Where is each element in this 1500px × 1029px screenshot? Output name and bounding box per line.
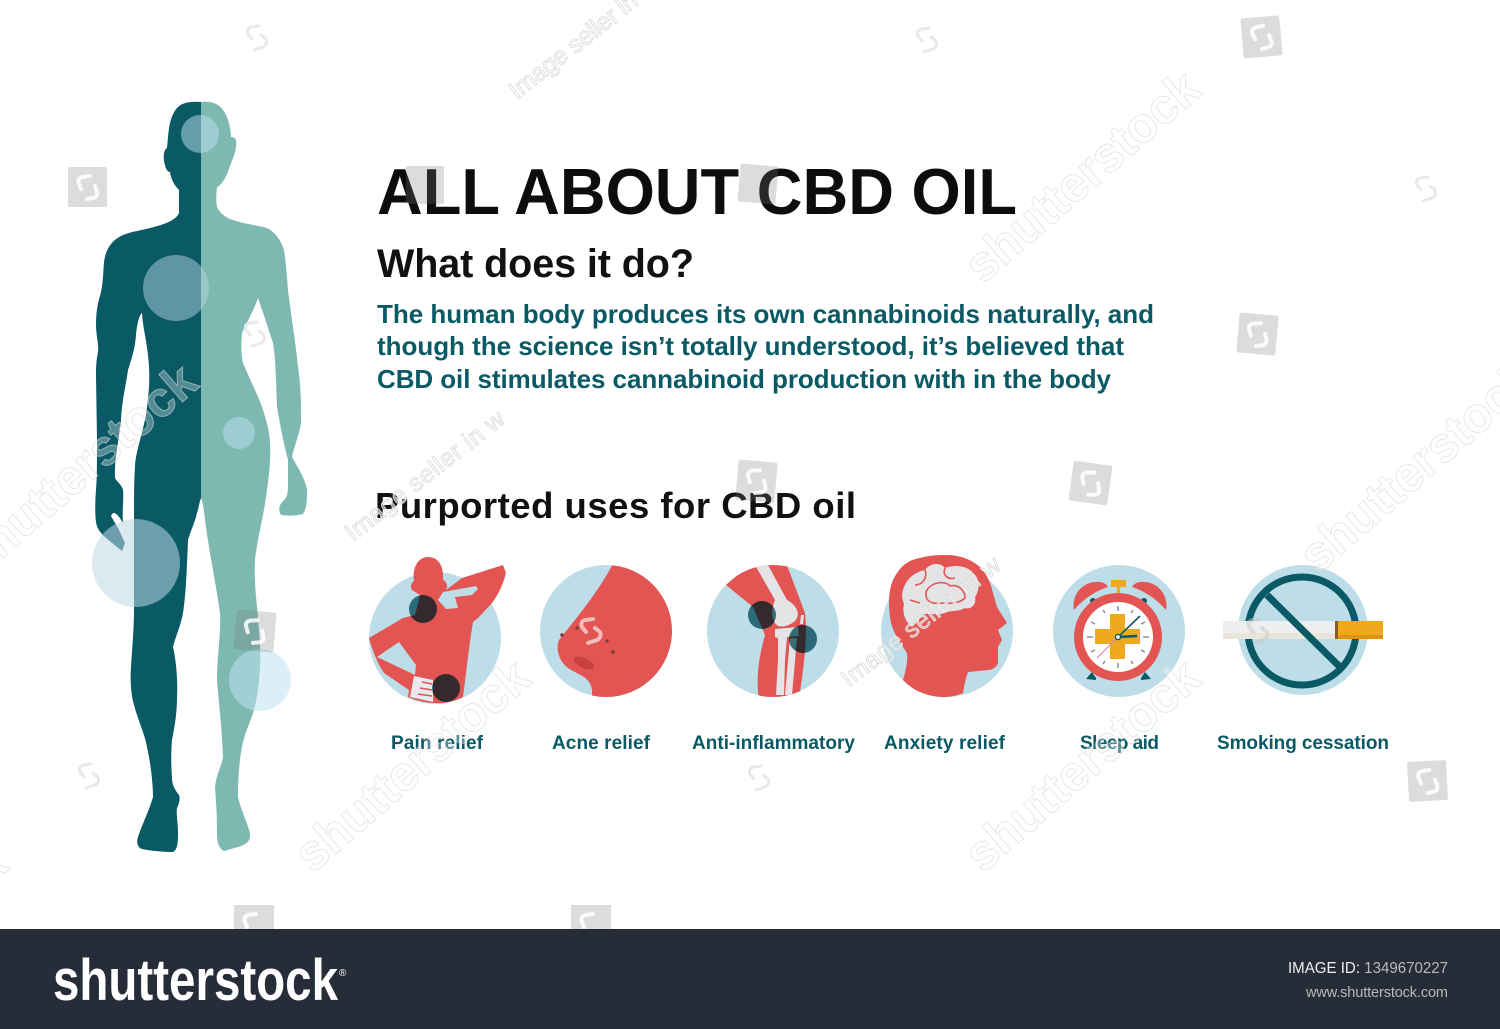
watermark layer: shutterstock <box>283 648 541 882</box>
subheading: purported uses: Purported uses for CBD oil <box>375 485 856 526</box>
watermark layer: shutterstock <box>953 648 1211 882</box>
label: acne relief: Acne relief <box>552 733 651 754</box>
watermark layer: Image seller in w <box>339 404 511 547</box>
highlight circle: hand <box>92 519 180 607</box>
body left half: dark teal <box>95 102 201 852</box>
body right half: light teal <box>201 102 307 851</box>
icon: acne relief <box>540 565 672 697</box>
website: www.shutterstock.com <box>1305 985 1448 1001</box>
highlight circle: head <box>181 115 219 153</box>
label: smoking cessation: Smoking cessation <box>1217 733 1389 754</box>
label: sleep aid: Sleep aid <box>1080 733 1159 754</box>
icon: anxiety relief <box>881 555 1013 697</box>
subheading: what does it do: What does it do? <box>377 242 694 286</box>
human body figure <box>92 102 307 852</box>
footer bar <box>0 929 1500 1029</box>
description paragraph: The human body produces its own cannabinoids naturally, and <box>377 299 1154 329</box>
label: anxiety relief: Anxiety relief <box>884 733 1006 754</box>
highlight circle: hip <box>223 417 255 449</box>
description paragraph: CBD oil stimulates cannabinoid production with in the body <box>377 364 1112 394</box>
label: pain relief: Pain relief <box>391 733 484 754</box>
image id: IMAGE ID: 1349670227 <box>1288 960 1448 977</box>
icon: pain relief <box>369 557 506 704</box>
icon: anti-inflammatory <box>707 560 839 700</box>
description paragraph <box>377 299 1154 394</box>
highlight circle: knee <box>229 649 291 711</box>
watermark layer: shutterstock <box>953 59 1211 293</box>
registered mark: ® <box>339 968 347 979</box>
title: ALL ABOUT CBD OIL <box>377 155 1017 228</box>
footer logo: shutterstock <box>53 948 339 1013</box>
icon: sleep aid alarm clock <box>1053 565 1185 697</box>
icon: smoking cessation <box>1223 565 1383 695</box>
description paragraph: though the science isn’t totally understood, it’s believed that <box>377 331 1124 361</box>
highlight circle: chest <box>143 255 209 321</box>
watermark layer: Image seller in w <box>835 550 1007 693</box>
label: anti-inflammatory: Anti-inflammatory <box>692 733 855 754</box>
